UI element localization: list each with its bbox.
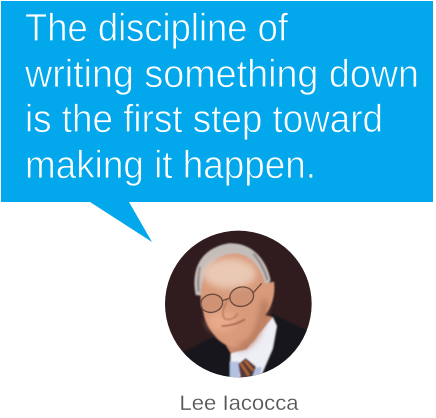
mouth [222,319,245,326]
name caption: Lee Iacocca [180,392,299,415]
speech bubble [1,1,433,242]
forehead highlight [203,258,256,288]
tie [238,358,256,378]
suit [182,314,307,378]
nose [223,300,237,319]
shirt [230,317,277,378]
photo background [165,230,312,378]
quote text: is the first step toward [25,98,383,141]
neck [218,315,273,353]
quote text [24,7,419,187]
cheek highlight [208,312,236,332]
quote text: writing something down [24,53,419,96]
hair [194,243,271,296]
glasses [199,283,262,314]
quote text: making it happen. [25,144,316,187]
face [201,253,274,348]
quote text: The discipline of [25,7,288,50]
portrait photo [165,230,312,378]
jaw shading [238,300,265,348]
